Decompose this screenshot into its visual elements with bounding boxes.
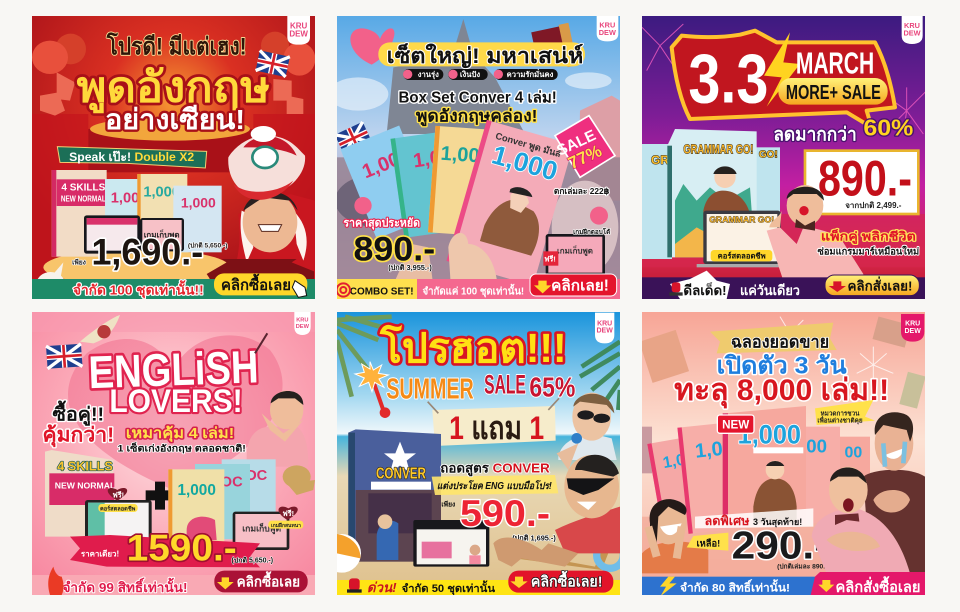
bottom bar [337,279,620,299]
text: subline: แต่งประโยค ENG แบบมือโปร! [437,479,553,492]
text: summer: SUMMER [386,373,474,405]
man [247,391,308,467]
building [579,96,620,186]
button [214,571,308,592]
book main [667,129,757,257]
book back left [642,144,672,259]
tablet bonus: เกมเก็บพูด [557,244,593,256]
per book price: ตกเล่มละ 222฿ [554,186,610,196]
tablet [413,520,489,567]
fireworks [642,24,927,134]
icon: small hearts [354,197,608,225]
tablet bonus: เกมฝึกตอบโต้ [573,227,610,236]
book: 4 Skills [52,170,107,257]
text: subline: 1 เซ็ตเก่งอังกฤษ ตลอดชาติ! [117,441,246,453]
roof [207,259,314,279]
panel: 3.3 March sale promo [642,16,927,299]
blurred books corners [639,317,926,473]
price: 290.- [732,523,828,567]
book: green: 1,0 [412,147,442,172]
book: Conver light blue [173,186,222,252]
icon: thermometer spark [355,362,390,418]
button: คลิกสั่งเลย! [847,275,912,293]
man in pink shirt [812,467,910,573]
book far right: 00 [844,444,862,461]
price: 1,690.- [91,231,203,273]
ribbon [70,535,260,567]
title: ENGLiSH [88,340,259,398]
deal text: ดีลเด็ด! [683,281,727,298]
book far left: 1,0 [662,451,687,472]
day text: แค่วันเดียว [740,283,800,298]
book: orange: 1,00 [440,143,480,167]
price: 590.- [460,492,550,534]
label: same price: ราคาเดียว! [81,549,119,559]
book: conver: CONVER [376,465,426,482]
hurry text: ด่วน! [367,580,397,595]
text: better value: คุ้มกว่า! [42,423,114,447]
logo [287,16,310,45]
icon: rabbit [38,262,64,279]
badge: free: ฟรี! [113,490,124,499]
sale tag: SALE [554,127,599,160]
icon: alarm [669,282,683,296]
title line: โปรดี! มีแต่เฮง! [106,32,247,61]
clouds [328,72,612,111]
logo: KRU [599,20,615,29]
book right [803,427,840,523]
tower [387,19,525,134]
icon: lanterns [32,32,315,76]
icon: UK flag [256,50,290,77]
deck chair [515,517,620,570]
logo: DEW [296,324,310,330]
laptop left [85,500,152,542]
price sign [805,151,918,214]
logo: KRU [296,317,308,323]
icon: cupid [283,465,315,495]
callout: เพื่อนต่างชาติคุย [817,415,863,424]
limit text: จำกัดแค่ 100 ชุดเท่านั้น! [422,283,524,297]
book: 4 Skills: 4 SKILLS [61,183,106,194]
text: 65 percent: 65% [529,372,575,403]
old price: (ปกติ 5,650.-) [188,241,227,249]
ribbon: discount [695,508,813,528]
book: pink main: Conver พูด มันส์ [494,130,563,160]
yellow stripe [432,475,558,495]
woman [642,499,708,595]
speech bubble sign [672,31,895,127]
badge: free [98,488,138,512]
callout: หมวดการชวน [821,410,860,417]
old price: (ปกติเล่มละ 890.-) [777,562,830,570]
logo: DEW [599,28,616,37]
text: break: ทะลุ 8,000 เล่ม!! [674,374,889,409]
text: 60 percent: 60% [863,114,913,140]
headline: โปรฮอต!!! [379,324,567,371]
icon: swim ring [597,542,623,568]
logo [595,313,614,343]
pill: More+ Sale [778,78,888,105]
beach ball [322,534,361,573]
tablet right: เกมเก็บพูด [242,522,282,535]
book: 4 skills [45,450,116,537]
book title: GRAMMAR GO! [683,142,753,156]
banner: 1 แถม 1 [449,410,544,446]
book left: 1,0 [694,438,724,463]
button [214,273,307,297]
benefit pills: ความรักมั่นคง [507,68,554,79]
icon: lightning [764,32,800,107]
panel: summer sale promo [322,312,623,596]
button: คลิกเลย! [551,276,609,294]
man in sunglasses [493,455,620,567]
text: 4 books: เหมาคุ้ม 4 เล่ม! [126,425,234,442]
button: คลิกซื้อเลย! [531,571,602,591]
callout [815,400,875,425]
icon: arrow [255,333,267,353]
limit text: จำกัด 80 สิทธิ์เท่านั้น! [680,579,790,595]
old price: (ปกติ 5,650.-) [232,557,273,565]
logo: DEW [905,328,921,335]
button [825,275,919,296]
laptop: GRAMMAR GO! [709,214,774,224]
text: More+ Sale: MORE+ SALE [786,81,881,104]
badge: new: NEW [722,418,749,431]
text: launch: เปิดตัว 3 วัน [717,352,847,379]
book: pink main: 1,000 [489,139,561,187]
subheadline: พูดอังกฤษคล่อง! [416,107,537,128]
logo: DEW [597,328,613,335]
book: teal: OC [221,475,243,491]
panel: launch celebration promo [639,312,926,596]
badge: free right [268,507,303,529]
book: cream: 1,000 [177,482,216,499]
tablets: เกมเก็บพุด [144,228,180,240]
price: 890.- [353,231,435,269]
badge: free right: เกมฝึกสนทนา [271,522,301,529]
bottom bar [642,271,925,299]
bottom bar [32,575,315,595]
tablet right [233,512,289,550]
logo: DEW [289,30,308,39]
text: 3.3: 3.3 [688,39,768,117]
benefit pills [403,68,558,80]
icon: arrow down [818,580,834,592]
tablet bonus: ฟรี! [544,255,556,264]
book: Conver yellow: 1,000 [143,185,180,201]
floor [642,517,925,577]
book main [723,406,806,523]
books conver [168,459,276,543]
book: orange [428,126,499,237]
button [508,571,613,593]
bottom bar [642,572,925,596]
book: blue: 1,00 [359,148,403,183]
combo set label: COMBO SET! [350,287,414,298]
label: best price: ราคาสุดประหยัด [343,216,420,230]
benefit pills: เงินปัง [460,70,480,79]
hand left [395,244,435,299]
book: Conver blue: 1,00 [111,190,139,206]
old price: (ปกติ 1,695.-) [512,534,556,543]
logo: KRU [597,320,612,327]
text: subline: ซ่อมแกรมมาร์เหมือนใหม่ [817,246,919,257]
stripes top [32,312,315,332]
icon: flame [48,567,64,595]
book far right [837,437,870,500]
logo: KRU [905,320,920,327]
hand [448,233,498,299]
book: pink main [446,120,573,286]
man in pink shirt [767,185,863,281]
ribbon: Speak Double X2: Speak เป๊ะ! Double X2 [69,150,194,164]
tablets [84,215,184,254]
badge: new [717,415,754,433]
logo: KRU [290,22,308,31]
icon: lightning [660,577,677,596]
logo [901,314,924,342]
label: only: เพียง [72,259,86,267]
banner [428,398,559,446]
book back left: GR [651,153,669,167]
book left [677,422,745,534]
book right: 00 [806,436,827,457]
text: pack: แพ็กคู่ พลิกชีวิต [821,229,916,245]
big heart backdrop [68,335,283,490]
panel: English lovers promo [32,312,315,595]
laptop [697,211,787,267]
text: March: MARCH [796,46,874,80]
label: only: เพียง [441,501,455,509]
logo [902,16,923,44]
logo [294,312,311,335]
book far left [647,435,712,529]
sale tag [554,116,615,177]
headline second line: อย่างเซียน! [105,104,245,135]
stage floor [642,214,925,267]
old price: จากปกติ 2,499.- [845,201,902,210]
badge: free right: ฟรี! [283,509,294,518]
bottom bar [32,279,315,299]
icon: red envelopes [40,72,303,116]
ribbon: celebrate: ฉลองยอดขาย [731,332,829,351]
book: Conver light blue: 1,000 [181,194,216,210]
icon: target [337,283,350,297]
sale tag: 77% [565,140,605,173]
palm leaves right [580,342,620,410]
man crying [863,412,925,573]
book: conver [348,429,441,562]
book: Conver blue [105,179,138,216]
ribbon: Speak Double X2 [57,147,207,168]
limit text: จำกัด 50 ชุดเท่านั้น [402,580,496,596]
title pill: เซ็ตใหญ่! มหาเสน่ห์ [387,41,583,69]
headline: พูดอังกฤษ [77,63,270,113]
book: Conver yellow [137,174,188,220]
headline: Box Set Conver 4 เล่ม! [398,90,557,107]
label: remaining [687,533,728,551]
logo [597,16,618,41]
button [530,274,617,296]
ribbon: celebrate [710,323,837,353]
text: buy pair: ซื้อคู่!! [52,401,104,427]
text: course title: ถอดสูตร CONVER [440,460,550,476]
badge: free: คอร์สตลอดชีพ [100,504,136,512]
text: discount: ลดมากกว่า [773,124,857,145]
man with water gun [557,393,617,470]
button text: คลิกสั่งซื้อเลย [835,576,920,596]
panel: big Conver box set promo [328,16,620,299]
big envelope with coins [88,117,253,172]
book back right [750,147,780,247]
palm leaves left [337,317,392,397]
book main: 1,000 [738,419,801,449]
ribbon: discount: ลดพิเศษ 3 วันสุดท้าย! [704,514,802,528]
mascot: man with lion costume [227,126,315,281]
fireworks [773,317,893,383]
podium [43,249,226,279]
book: 4 Skills: NEW NORMAL [61,194,106,203]
price: 1590.- [127,527,237,569]
book set [52,170,222,257]
button: คลิกซื้อเลย [221,273,291,294]
book: blue [340,126,404,238]
old price: (ปกติ 3,955.-) [388,263,432,272]
bottom bar [337,580,620,596]
logo: DEW [903,29,921,38]
icon: plus [146,482,174,510]
text: sale: SALE [484,369,526,399]
limit text: จำกัด 99 สิทธิ์เท่านั้น! [62,577,187,595]
label: remaining: เหลือ! [696,538,720,549]
book: green [390,132,438,238]
book: light blue: DC [246,468,268,484]
icon: heart [350,28,394,65]
price: 890.- [818,151,912,207]
title second line: LOVERS! [109,383,243,419]
book: 4 skills: NEW NORMAL [55,480,116,490]
book: 4 skills: 4 SKILLS [57,460,113,474]
icon: winged apple [80,315,120,343]
book back right: GO! [759,149,778,160]
limit text: จำกัด 100 ชุดเท่านั้น!! [73,280,204,299]
button: คลิกซื้อเลย [237,571,300,590]
tablet bonus [543,227,610,276]
crowd [335,157,620,281]
icon: UK flag [337,121,370,149]
icon: UK flag [46,344,83,369]
laptop: คอร์สตลอดชีพ [718,251,766,260]
panel: Chinese new year speaking promo [32,16,315,299]
icon: siren [347,578,362,593]
benefit pills: งานรุ่ง [418,70,439,80]
icon: gift envelope [531,22,573,68]
logo: KRU [904,21,920,30]
